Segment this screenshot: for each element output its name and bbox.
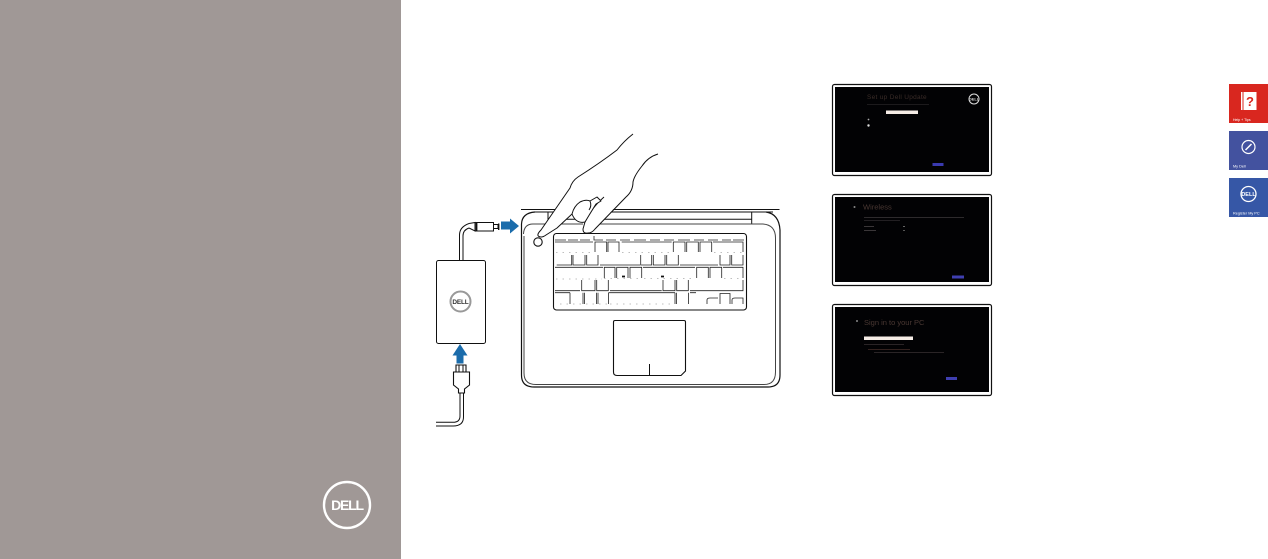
tile: Help and Tips — [1229, 84, 1268, 123]
tile: Help and Tips: Help + Tips — [1233, 118, 1251, 122]
laptop base outline — [522, 212, 780, 387]
screen: Set up — [832, 84, 992, 176]
arrow: into adapter — [452, 344, 468, 364]
logo: Dell on sidebar: DELL — [331, 497, 365, 513]
tile: My Dell: My Dell — [1233, 164, 1246, 168]
tile: Register My PC: DELL — [1241, 192, 1256, 198]
laptop lid and hinge — [521, 210, 780, 224]
keyboard — [554, 234, 746, 310]
tile: Register My PC — [1229, 178, 1268, 217]
logo: Dell on adapter — [450, 292, 470, 312]
tile: Help and Tips: ? — [1246, 94, 1254, 109]
illustration: laptop — [521, 210, 780, 387]
screen: Sign in to your PC: Sign in to your PC — [864, 318, 925, 327]
touchpad — [614, 320, 686, 376]
screen: Set up: DELL — [969, 96, 980, 102]
illustration: power adapter and cables — [436, 222, 499, 426]
power plug and cord — [436, 365, 470, 426]
adapter body — [436, 260, 486, 344]
screen: Set up: Set up Dell Update — [867, 94, 927, 101]
arrow: into laptop power port — [501, 218, 519, 234]
illustration: hand pressing power button — [538, 134, 658, 237]
tile: Register My PC: Register My PC — [1233, 212, 1260, 216]
logo: Dell on adapter: DELL — [452, 299, 469, 306]
screen: Wireless: Wireless — [863, 202, 892, 212]
logo: Dell on sidebar — [324, 482, 370, 528]
power button — [534, 238, 542, 246]
panel: left grey sidebar — [0, 0, 401, 559]
screen: Sign in to your PC — [832, 304, 992, 396]
tile: My Dell — [1229, 131, 1268, 170]
screen: Wireless — [832, 194, 992, 286]
